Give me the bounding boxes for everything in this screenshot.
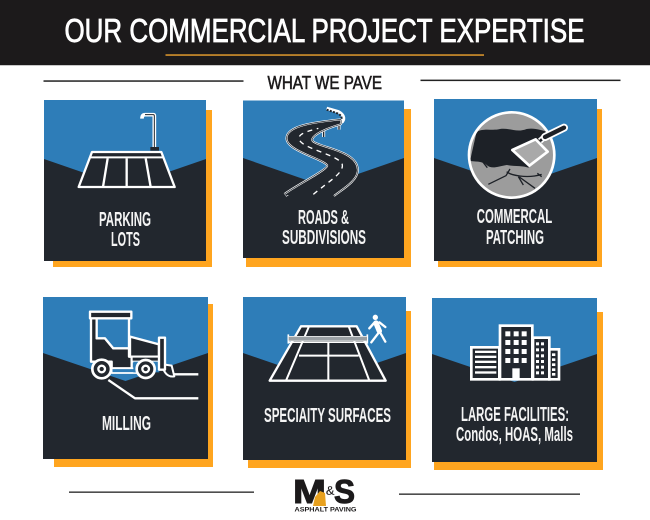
label: roads and subdivisions	[282, 207, 366, 249]
section heading: WHAT WE PAVE	[268, 73, 382, 93]
label: large facilities: LARGE FACILITIES:	[461, 404, 569, 426]
logo: M&S Asphalt Paving	[293, 473, 356, 514]
label: roads and subdivisions: SUBDIVISIONS	[282, 227, 366, 249]
footer rules	[69, 492, 580, 495]
label: large facilities	[456, 404, 573, 446]
label: parking lots: LOTS	[111, 229, 140, 251]
panel: milling	[43, 297, 213, 467]
panel: large facilities	[432, 298, 603, 470]
icon: winding road	[285, 108, 357, 195]
label: commercial patching	[477, 206, 552, 249]
panel: parking lots	[44, 100, 212, 267]
icon: parking lot	[79, 115, 175, 187]
logo: M&S Asphalt Paving: &	[326, 483, 335, 498]
title underline	[166, 54, 484, 56]
label: roads and subdivisions: ROADS &	[298, 207, 349, 229]
panel: roads and subdivisions	[243, 100, 411, 267]
icon: runner	[369, 315, 385, 342]
logo: M&S Asphalt Paving: M	[293, 473, 326, 510]
label: parking lots: PARKING	[99, 209, 151, 231]
label: milling: MILLING	[102, 413, 151, 435]
panel: commercial patching	[434, 99, 602, 267]
logo: M&S Asphalt Paving: ASPHALT PAVING	[294, 506, 356, 514]
icon: milling machine	[90, 312, 198, 398]
label: specialty surfaces: SPECIAITY SURFACES	[264, 405, 391, 427]
label: parking lots	[99, 209, 151, 251]
icon: patching trowel	[469, 112, 564, 198]
logo: M&S Asphalt Paving: S	[334, 473, 355, 510]
label: commercial patching: PATCHING	[486, 227, 544, 249]
icon: buildings	[471, 326, 559, 379]
icon: sports court	[270, 326, 386, 381]
header banner	[0, 0, 650, 66]
label: commercial patching: COMMERCAL	[477, 206, 552, 228]
panel: specialty surfaces	[243, 297, 411, 468]
